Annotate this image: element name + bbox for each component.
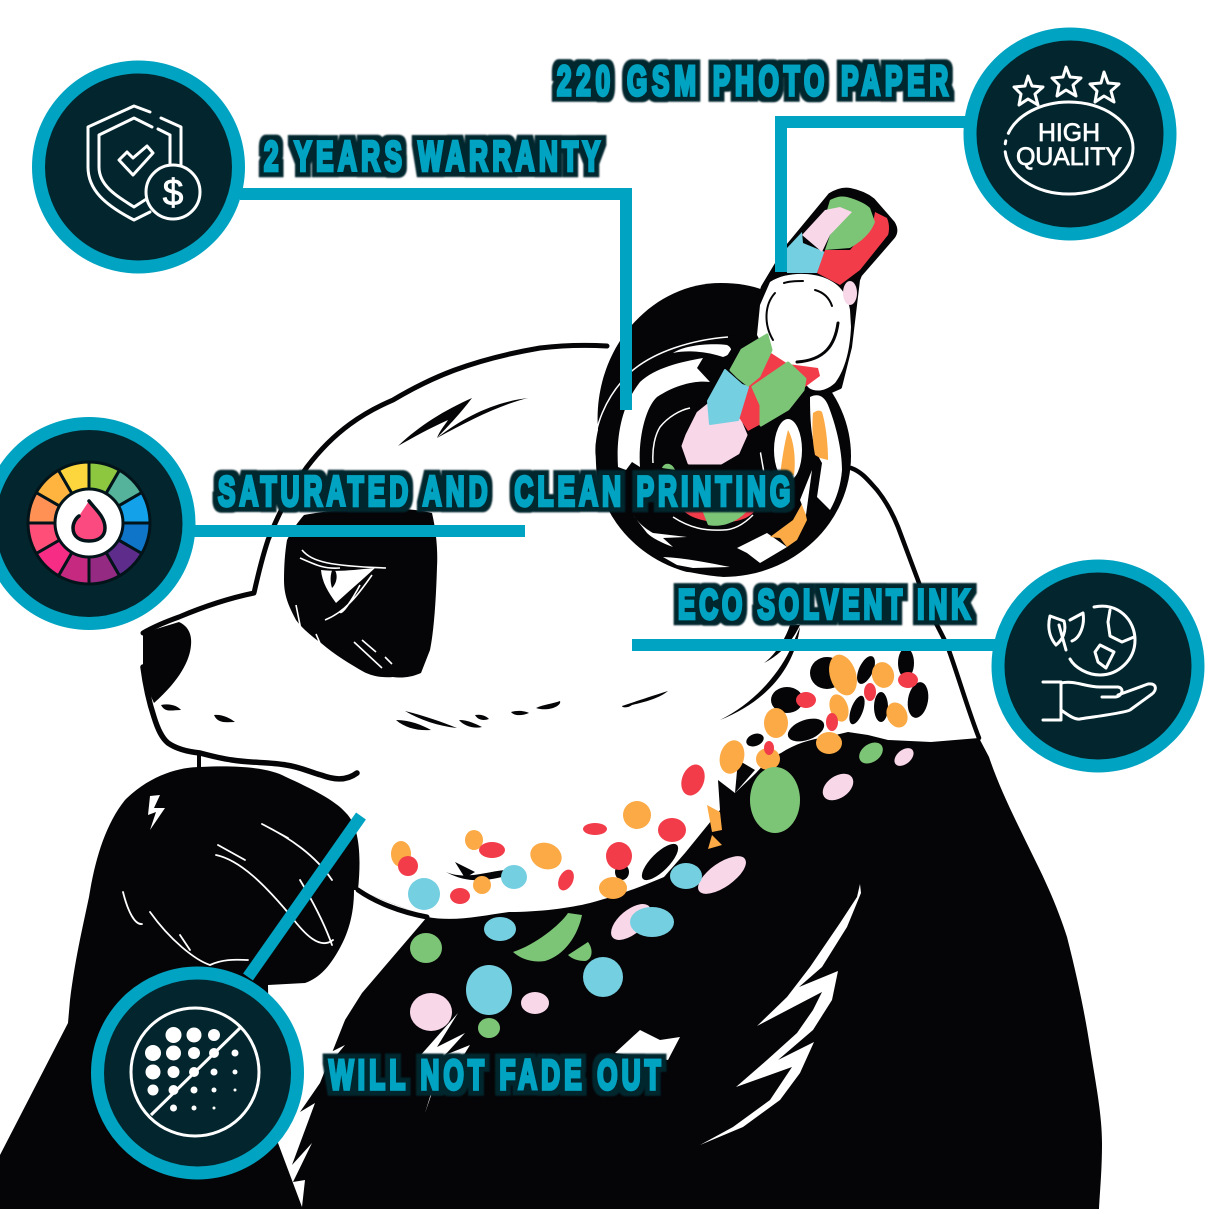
white fur strokes on body bbox=[148, 795, 861, 1145]
heading: will not fade: WILL NOT FADE OUT bbox=[329, 1052, 661, 1099]
white gap between paw and chest bbox=[268, 890, 427, 1207]
headphone ear cup bbox=[595, 283, 851, 578]
badge: high quality: QUALITY bbox=[1016, 143, 1122, 171]
connector line: high quality bbox=[781, 122, 968, 272]
nose bbox=[143, 622, 191, 703]
badge: warranty shield bbox=[38, 67, 238, 267]
badge: eco solvent bbox=[998, 566, 1198, 766]
paint splash dots on neck and chest bbox=[391, 648, 931, 1038]
connector line: warranty bbox=[240, 194, 626, 410]
badge: colour wheel bbox=[0, 424, 189, 624]
eye patch bbox=[284, 508, 437, 678]
badge: no fade bbox=[98, 973, 298, 1173]
ear cup orange patches bbox=[770, 395, 842, 547]
badge: high quality: HIGH bbox=[1038, 119, 1100, 147]
paw fur lines bbox=[123, 824, 333, 965]
badge: warranty shield: $ bbox=[163, 172, 183, 213]
connector line: saturated printing bbox=[190, 525, 525, 537]
connector line: fade bbox=[248, 816, 361, 977]
head outline bbox=[143, 345, 979, 917]
heading: saturated printing: SATURATED AND CLEAN PRINTING bbox=[218, 468, 790, 515]
head and muzzle details bbox=[161, 398, 800, 880]
badge: high quality bbox=[970, 34, 1170, 234]
panda body silhouette bbox=[0, 732, 1102, 1209]
headband with paint bbox=[680, 190, 895, 470]
heading: eco solvent ink: ECO SOLVENT INK bbox=[678, 581, 970, 628]
heading: photo paper: 220 GSM PHOTO PAPER bbox=[557, 58, 948, 105]
connector line: eco solvent bbox=[632, 639, 1000, 651]
heading: warranty: 2 YEARS WARRANTY bbox=[264, 133, 600, 180]
